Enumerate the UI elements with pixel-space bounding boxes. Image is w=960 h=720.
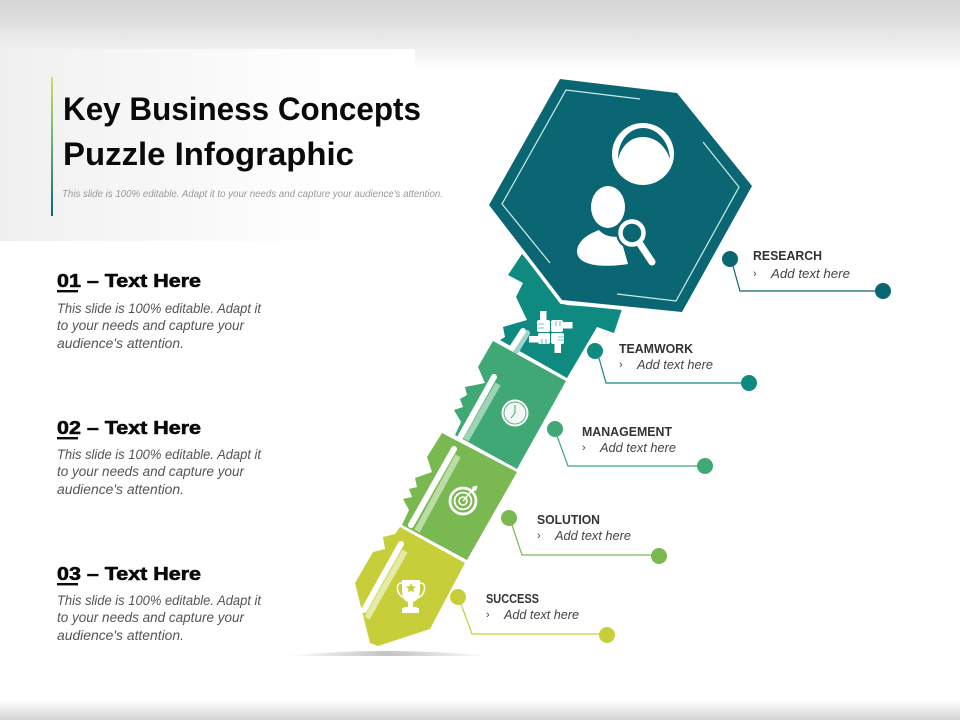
key piece: solution [402, 433, 517, 560]
key piece: teamwork [500, 254, 622, 378]
hexagon inner outline [502, 90, 739, 301]
background top band [0, 0, 960, 72]
callout: solution: SOLUTION [537, 513, 600, 527]
key ground shadow [285, 651, 490, 656]
callout: research: › [753, 268, 757, 280]
icon: trophy [397, 580, 425, 613]
text block 02: This slide is 100% editable. Adapt it [57, 447, 262, 462]
title: Key Business Concepts [63, 91, 421, 127]
callout: success: › [486, 609, 490, 621]
text block 02: to your needs and capture your [57, 464, 245, 479]
callout: teamwork [587, 342, 757, 391]
callout: research: Add text here [770, 267, 850, 281]
callout: teamwork: TEAMWORK [619, 342, 693, 356]
callout: solution: › [537, 530, 541, 542]
text block 01: audience's attention. [57, 336, 184, 351]
title [63, 91, 421, 172]
text block 03: to your needs and capture your [57, 610, 245, 625]
text block 02: audience's attention. [57, 482, 184, 497]
text block 01: This slide is 100% editable. Adapt it [57, 301, 262, 316]
icon: keyhole circle [612, 123, 674, 185]
subtitle: This slide is 100% editable. Adapt it to your needs and capture your audience's attention. [62, 188, 443, 200]
text block 02 [57, 418, 262, 497]
text block 01: 01 – Text Here [57, 271, 201, 291]
callout: success: Add text here [503, 608, 579, 622]
callout: teamwork: Add text here [636, 358, 713, 372]
text block 03: audience's attention. [57, 628, 184, 643]
text block 03 [57, 564, 262, 643]
callout: research: RESEARCH [753, 249, 822, 263]
key piece: success [355, 527, 465, 646]
callout: solution: Add text here [554, 529, 631, 543]
key head: research hexagon [489, 79, 752, 313]
key piece: management [454, 341, 566, 469]
title panel [0, 49, 443, 241]
callout: success: SUCCESS [486, 592, 539, 606]
icon: joined hands [529, 311, 572, 353]
callout: management: Add text here [599, 441, 676, 455]
text block 01 [57, 271, 262, 351]
text block 01: to your needs and capture your [57, 318, 245, 333]
callout: success [450, 589, 615, 643]
callout: management [547, 421, 713, 474]
callout: management: › [582, 442, 586, 454]
callout: management: MANAGEMENT [582, 425, 672, 439]
text block 03: 03 – Text Here [57, 564, 201, 584]
icon: clock [502, 400, 528, 426]
title: Puzzle Infographic [63, 136, 354, 172]
icon: person with magnifier [577, 186, 652, 266]
callout: solution [501, 510, 667, 564]
icon: target [450, 486, 477, 514]
key illustration [355, 79, 752, 646]
callout: teamwork: › [619, 359, 623, 371]
text block 02: 02 – Text Here [57, 418, 201, 438]
background bottom band [0, 700, 960, 720]
callout: research [722, 249, 891, 299]
text block 03: This slide is 100% editable. Adapt it [57, 593, 262, 608]
